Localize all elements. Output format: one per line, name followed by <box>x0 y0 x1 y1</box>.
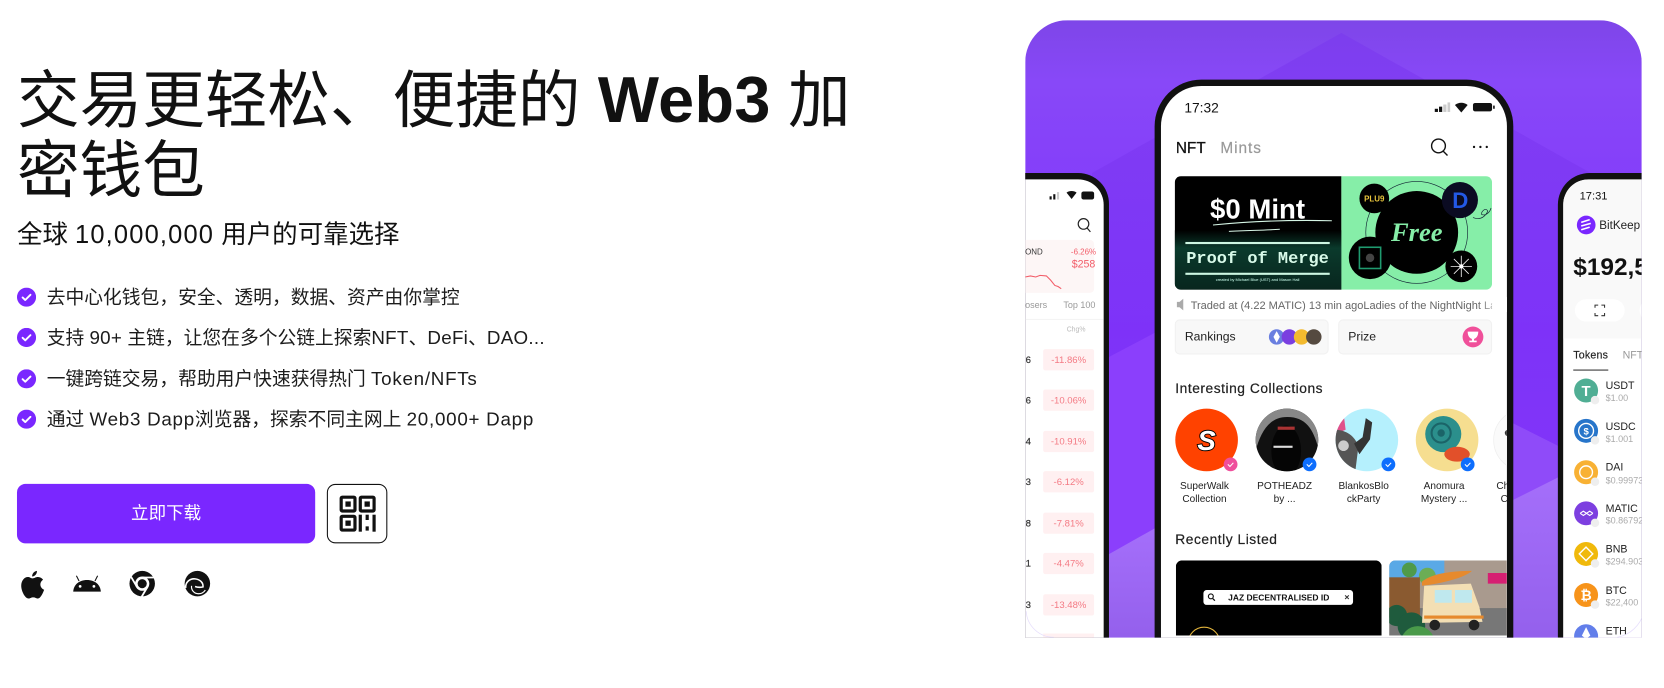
token: bnb: BNB <box>1606 543 1627 555</box>
prize card: Prize <box>1348 330 1376 344</box>
change rows: -10.91% <box>1051 437 1087 448</box>
banner: free mint: Free <box>1390 217 1443 247</box>
market card: $258 <box>1072 258 1095 270</box>
token: btc <box>1574 583 1638 609</box>
left phone: 3 <box>1026 477 1031 488</box>
icon: edge <box>185 571 210 596</box>
prize card <box>1339 320 1492 354</box>
token: eth <box>1574 624 1627 648</box>
left phone: 4 <box>1026 437 1032 448</box>
token: matic: $0.86792 <box>1606 516 1643 526</box>
token: btc: ₿ <box>1580 588 1592 603</box>
collection: blankos: ckParty <box>1347 494 1381 505</box>
change rows: -4.47% <box>1054 559 1084 570</box>
listing card: food truck <box>1389 560 1507 636</box>
collection: partially hidden <box>1494 414 1507 502</box>
market tabs: Top 100 <box>1063 300 1095 310</box>
left phone: 6 <box>1026 395 1031 406</box>
left phone: Chg% <box>1067 327 1085 334</box>
trade ticker: Traded at (4.22 MATIC) 13 min agoLadies of the NightNight La <box>1191 300 1497 312</box>
panel background <box>1025 20 1645 638</box>
token: usdc <box>1574 419 1636 445</box>
change rows: -10.06% <box>1051 395 1087 406</box>
token: usdc: $ <box>1583 427 1589 438</box>
right phone <box>1558 173 1642 638</box>
banner: free mint <box>1341 176 1492 290</box>
center phone: Mints <box>1220 140 1262 157</box>
token: usdt: $1.00 <box>1606 393 1628 403</box>
feature: dapp browser: 通过 Web3 Dapp浏览器，探索不同主网上 20,000+ Dapp <box>47 409 534 430</box>
token: usdt: USDT <box>1606 380 1635 392</box>
market card <box>1025 240 1096 293</box>
token tabs: NFT <box>1623 350 1644 362</box>
left phone status bar <box>1050 191 1094 200</box>
listing card: jaz decentralised id: JAZ DECENTRALISED ID <box>1228 593 1329 603</box>
market card: OND <box>1025 248 1043 257</box>
subtitle: 全球 10,000,000 用户的可靠选择 <box>17 221 400 249</box>
collection: anomura: Anomura <box>1424 481 1465 492</box>
token: usdt: T <box>1582 384 1591 400</box>
platform icons <box>21 570 210 598</box>
token: usdt <box>1574 379 1635 404</box>
title: 密钱包 <box>17 136 205 206</box>
collection: anomura: Mystery ... <box>1421 494 1467 505</box>
banner: proof of merge: Proof of Merge <box>1186 250 1329 269</box>
market tabs: osers <box>1025 300 1048 310</box>
banner: proof of merge: $0 Mint <box>1210 194 1305 225</box>
feature: cross-chain: 一键跨链交易，帮助用户快速获得热门 Token/NFTs <box>47 368 478 389</box>
icon: chrome <box>129 571 155 597</box>
change rows <box>1043 349 1094 638</box>
token tabs: Tokens <box>1573 350 1608 362</box>
status bar: 17:32 <box>1184 100 1219 115</box>
left phone: 3 <box>1026 600 1031 611</box>
collection: superwalk: S <box>1197 425 1216 456</box>
collection: blankos: BlankosBlo <box>1338 481 1389 492</box>
collection: potheadz <box>1255 409 1319 505</box>
token: dai <box>1574 460 1643 486</box>
left phone: 6 <box>1026 355 1031 366</box>
banner: free mint: PLU9 <box>1364 195 1385 204</box>
rankings card <box>1175 320 1328 354</box>
banner: free mint: D <box>1452 188 1468 213</box>
collection: potheadz: POTHEADZ <box>1257 481 1312 492</box>
collection: superwalk <box>1175 409 1238 505</box>
banner: proof of merge <box>1175 176 1341 290</box>
collection: anomura <box>1416 409 1478 505</box>
change rows: -7.81% <box>1054 518 1084 529</box>
token: btc: $22,400 <box>1606 597 1638 607</box>
token: bnb <box>1574 542 1643 568</box>
change rows: -13.48% <box>1051 600 1087 611</box>
heading: recently listed: Recently Listed <box>1175 532 1277 547</box>
icon: apple <box>21 571 44 599</box>
feature: decentralized wallet: 去中心化钱包，安全、透明，数据、资产由你掌控 <box>47 287 460 308</box>
download button: 立即下载 <box>131 504 201 523</box>
center phone <box>1154 80 1514 638</box>
collection: partially hidden: C <box>1501 494 1508 505</box>
download button <box>17 484 315 543</box>
icon: qr code button <box>327 484 387 543</box>
right phone status time: 17:31 <box>1580 191 1607 203</box>
change rows: -11.86% <box>1051 355 1087 366</box>
heading: interesting collections: Interesting Collections <box>1175 381 1323 396</box>
tabs: NFT <box>1176 140 1206 157</box>
collection: blankos <box>1335 409 1398 505</box>
rankings card: Rankings <box>1185 330 1236 344</box>
more icon <box>1473 146 1488 148</box>
left phone <box>1017 173 1109 638</box>
token: usdc: USDC <box>1606 421 1636 433</box>
feature: multi-chain: 支持 90+ 主链，让您在多个公链上探索NFT、DeFi、DAO... <box>47 327 545 348</box>
banner <box>1175 176 1492 290</box>
icon: android <box>73 576 101 592</box>
action pills <box>1594 304 1642 316</box>
change rows: -6.12% <box>1054 477 1084 488</box>
token: btc: BTC <box>1606 585 1627 597</box>
token: eth: ETH <box>1606 626 1627 638</box>
token tabs <box>1573 350 1644 371</box>
token: matic <box>1574 501 1643 527</box>
token: matic: MATIC <box>1606 503 1638 515</box>
token: dai: $0.99973 <box>1606 475 1643 485</box>
left phone: 8 <box>1026 518 1031 529</box>
token: dai: DAI <box>1606 462 1623 474</box>
market tabs <box>1026 302 1095 310</box>
collection: partially hidden: Ch <box>1496 481 1509 492</box>
collection: superwalk: SuperWalk <box>1180 481 1230 492</box>
listing card: jaz decentralised id <box>1176 560 1382 636</box>
collection: potheadz: by ... <box>1274 494 1296 505</box>
left phone search icon <box>1078 219 1090 232</box>
panel: app showcase <box>1025 20 1642 638</box>
left phone: 1 <box>1026 559 1031 570</box>
feature list <box>17 287 545 430</box>
search icon <box>1432 139 1448 155</box>
title: 交易更轻松、便捷的 Web3 加 <box>17 64 851 136</box>
token: usdc: $1.001 <box>1606 434 1633 444</box>
token: bnb: $294.903 <box>1606 557 1643 567</box>
market card: -6.26% <box>1071 248 1096 257</box>
banner: proof of merge: created by Michael Blue (UST) and Mason Hall <box>1216 277 1299 282</box>
bitkeep logo <box>1577 216 1647 234</box>
collection: superwalk: Collection <box>1182 494 1227 505</box>
title <box>17 64 851 206</box>
